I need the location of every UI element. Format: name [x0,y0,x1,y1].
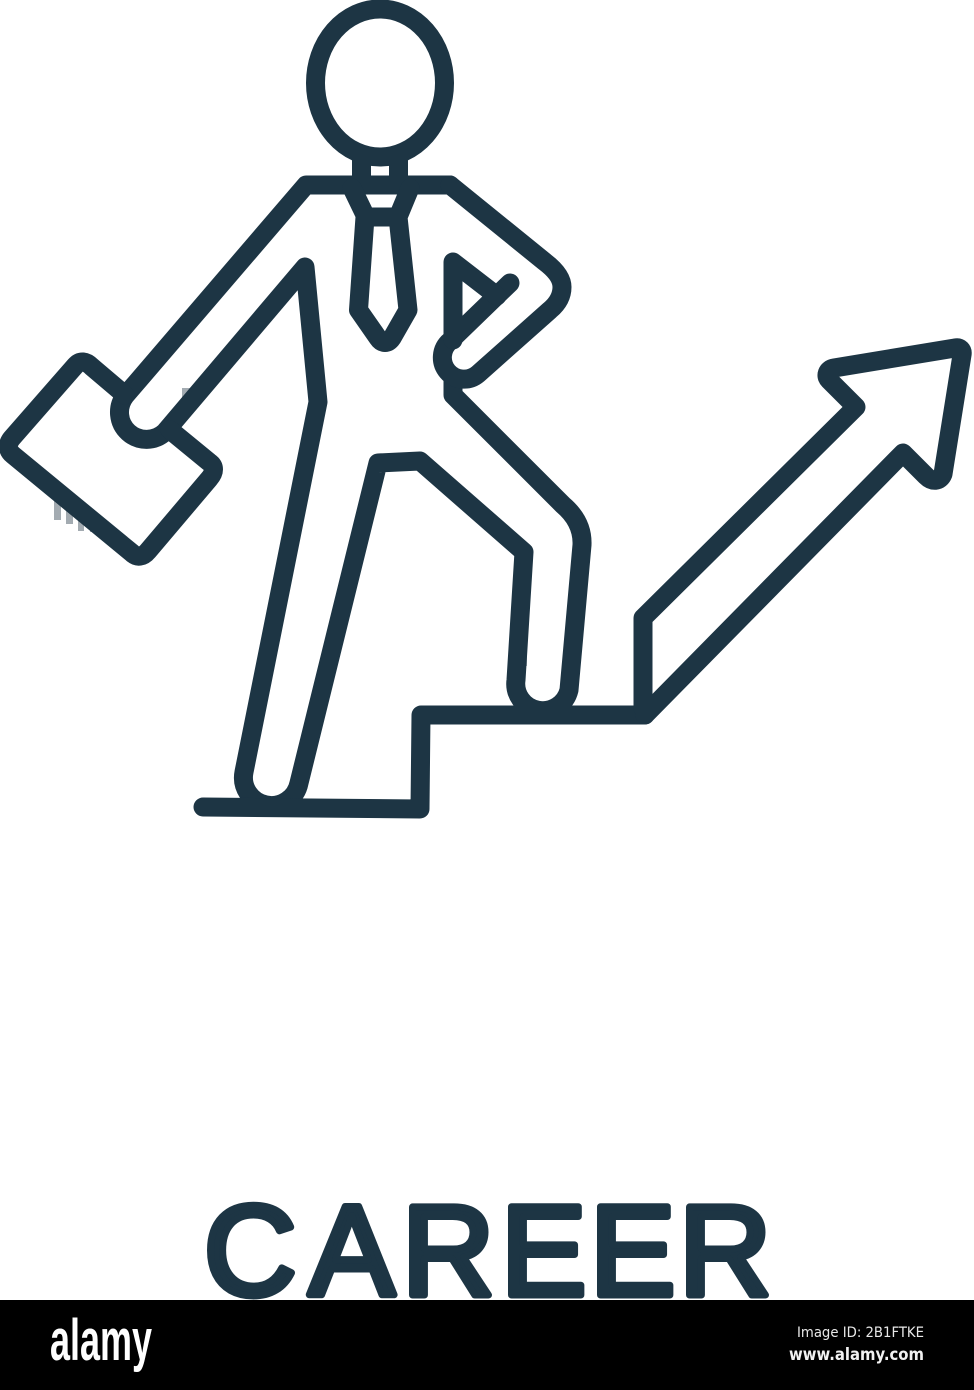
neck [362,155,398,185]
head [316,9,444,157]
footer logo: alamy: alamy [50,1308,152,1373]
watermark fragments [54,388,527,666]
tie [352,188,410,342]
briefcase [8,362,213,556]
footer image id: Image ID: 2B1FTKE [797,1325,924,1341]
hip triangle [453,262,497,340]
title: CAREER: CAREER [204,1180,771,1323]
right arm with hand on hip [442,185,562,379]
rising arrow [643,348,962,715]
stair step [203,715,645,809]
left arm and left leg outline [119,185,582,806]
footer bar [0,1300,974,1390]
icon: businessman climbing a step with rising arrow [8,9,962,809]
footer url: www.alamy.com [789,1345,924,1364]
